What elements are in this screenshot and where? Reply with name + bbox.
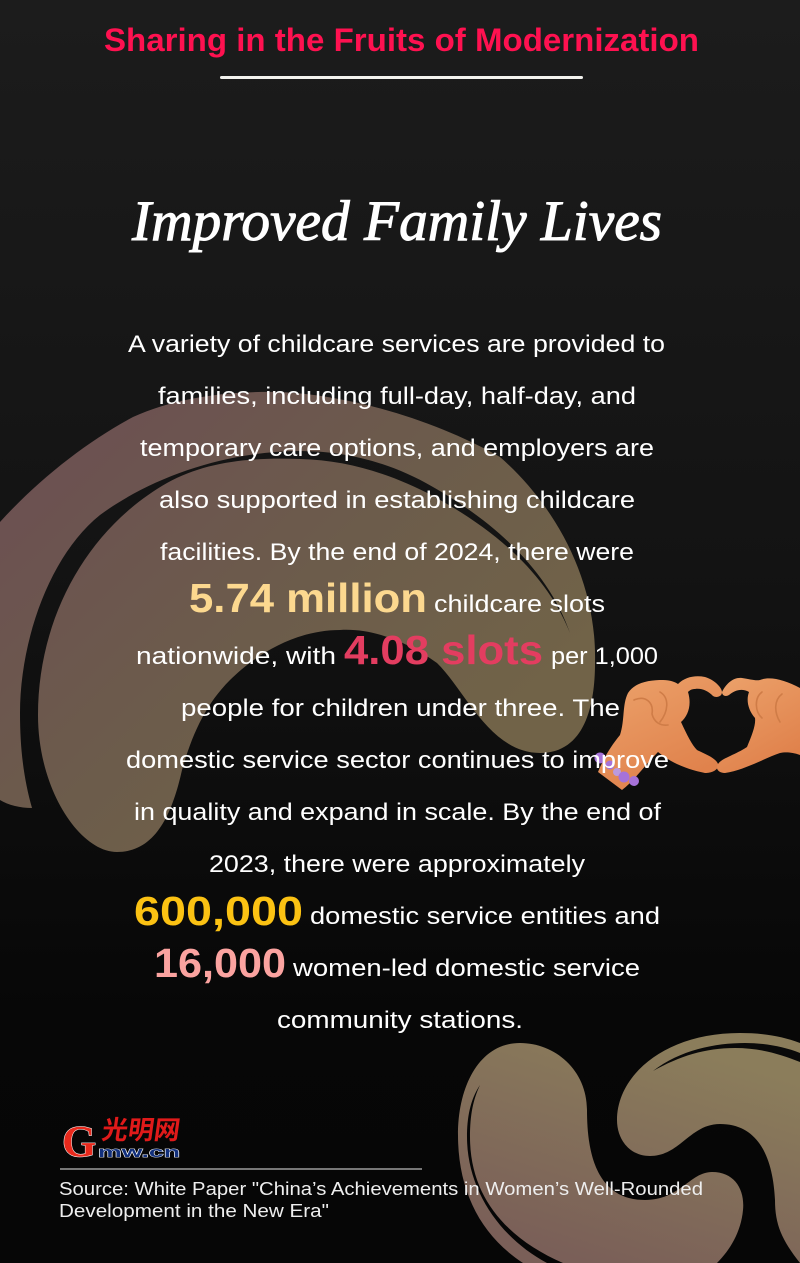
body text: facilities. By the end of 2024, there were [160, 539, 634, 566]
icon: heart hands [594, 676, 800, 790]
stat: 5.74 million: 5.74 million [189, 575, 427, 621]
stat: 600,000: 600,000 [134, 888, 303, 934]
body text: temporary care options, and employers are [140, 435, 654, 462]
body text: childcare slots [434, 591, 605, 618]
body text: nationwide, with [136, 643, 336, 670]
body text: 2023, there were approximately [209, 851, 586, 878]
footer rule [60, 1168, 422, 1170]
decorative swirl: bottom right blob [617, 1033, 800, 1263]
source text: Development in the New Era" [59, 1201, 329, 1221]
body text: people for children under three. The [181, 695, 620, 722]
body text: families, including full-day, half-day, and [158, 383, 636, 410]
right hand [717, 678, 800, 773]
body text: in quality and expand in scale. By the end of [134, 799, 661, 826]
header rule [220, 76, 583, 79]
body text: domestic service sector continues to improve [126, 747, 669, 774]
stat: 4.08 slots: 4.08 slots [344, 627, 543, 673]
left hand [598, 676, 722, 790]
body text: A variety of childcare services are provided to [128, 331, 665, 358]
finger creases [634, 692, 782, 725]
swirl slit [653, 1043, 800, 1071]
body text [126, 331, 669, 1034]
logo: gmw.cn: mw.cn [98, 1144, 180, 1161]
logo: gmw.cn [62, 1115, 182, 1166]
bracelet [594, 752, 639, 786]
main heading: Improved Family Lives [131, 190, 662, 253]
source text: Source: White Paper "China’s Achievements in Women’s Well-Rounded [59, 1179, 703, 1199]
logo: gmw.cn: 光明网 [100, 1115, 182, 1145]
body text: community stations. [277, 1007, 523, 1034]
header title: Sharing in the Fruits of Modernization [104, 22, 699, 58]
decorative swirl: bottom left blob [458, 1043, 743, 1263]
body text: women-led domestic service [292, 955, 640, 982]
stat: 16,000: 16,000 [154, 940, 286, 986]
logo: gmw.cn: G [62, 1117, 96, 1166]
body text: domestic service entities and [310, 903, 660, 930]
decorative swirl: upper left arch [0, 392, 595, 852]
body text: per 1,000 [551, 643, 658, 670]
source text [59, 1179, 703, 1221]
body text: also supported in establishing childcare [159, 487, 635, 514]
